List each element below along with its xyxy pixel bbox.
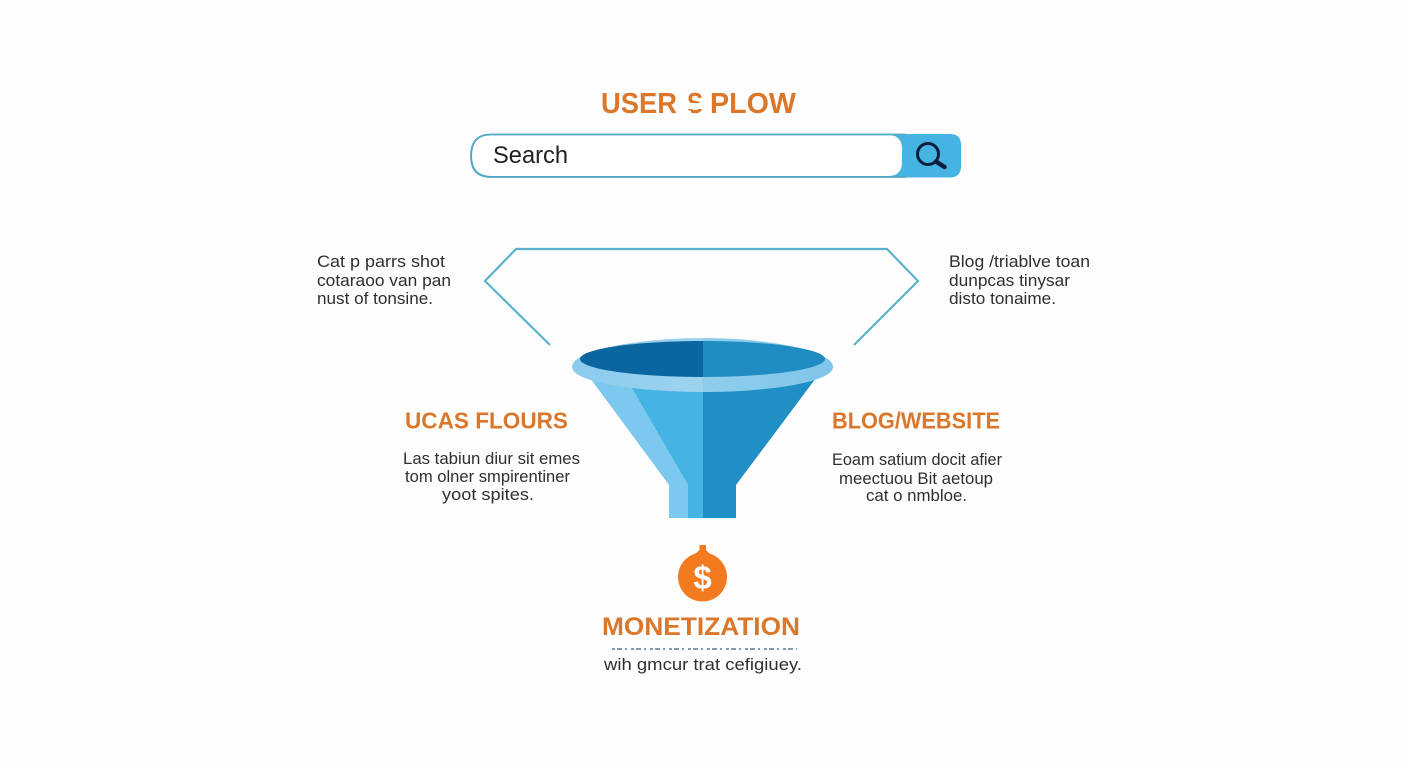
- funnel body middle: [630, 385, 703, 518]
- left description: Las tabiun diur sit emes: [403, 450, 580, 468]
- title: USER: [601, 88, 677, 120]
- left description: [403, 450, 580, 504]
- left description: tom olner smpirentiner: [405, 468, 570, 486]
- right description: Eoam satium docit afier: [832, 451, 1002, 469]
- icon: dollar coin bag: [678, 545, 727, 602]
- title: S: [687, 88, 703, 120]
- right heading: BLOG/WEBSITE: [832, 408, 1000, 434]
- icon: magnifier: [918, 144, 944, 167]
- top right text block: disto tonaime.: [949, 290, 1056, 308]
- monetization description: wih gmcur trat cefigiuey.: [603, 656, 802, 674]
- top left text block: [317, 253, 451, 308]
- right description: meectuou Bit aetoup: [839, 470, 993, 488]
- right description: cat o nmbloe.: [866, 487, 967, 505]
- garbled text line: [612, 648, 797, 650]
- funnel rim left: [572, 338, 703, 392]
- left heading: UCAS FLOURS: [405, 408, 568, 434]
- search bar: [471, 134, 961, 178]
- funnel body left light band: [590, 378, 688, 518]
- top right text block: dunpcas tinysar: [949, 272, 1071, 290]
- outline connector above funnel: [485, 249, 918, 345]
- title: PLOW: [710, 88, 797, 120]
- funnel: [572, 338, 833, 518]
- right description: [832, 451, 1002, 505]
- top left text block: cotaraoo van pan: [317, 272, 451, 290]
- monetization heading: MONETIZATION: [602, 613, 800, 641]
- icon: dollar coin bag: $: [693, 559, 712, 596]
- title: [601, 88, 797, 120]
- funnel opening: [580, 341, 703, 377]
- top right text block: [949, 253, 1090, 308]
- left description: yoot spites.: [442, 486, 534, 504]
- top left text block: nust of tonsine.: [317, 290, 433, 308]
- search bar: Search: [493, 142, 568, 169]
- funnel body right: [703, 378, 816, 518]
- top left text block: Cat p parrs shot: [317, 253, 445, 271]
- top right text block: Blog /triablve toan: [949, 253, 1090, 271]
- funnel rim right: [703, 338, 833, 392]
